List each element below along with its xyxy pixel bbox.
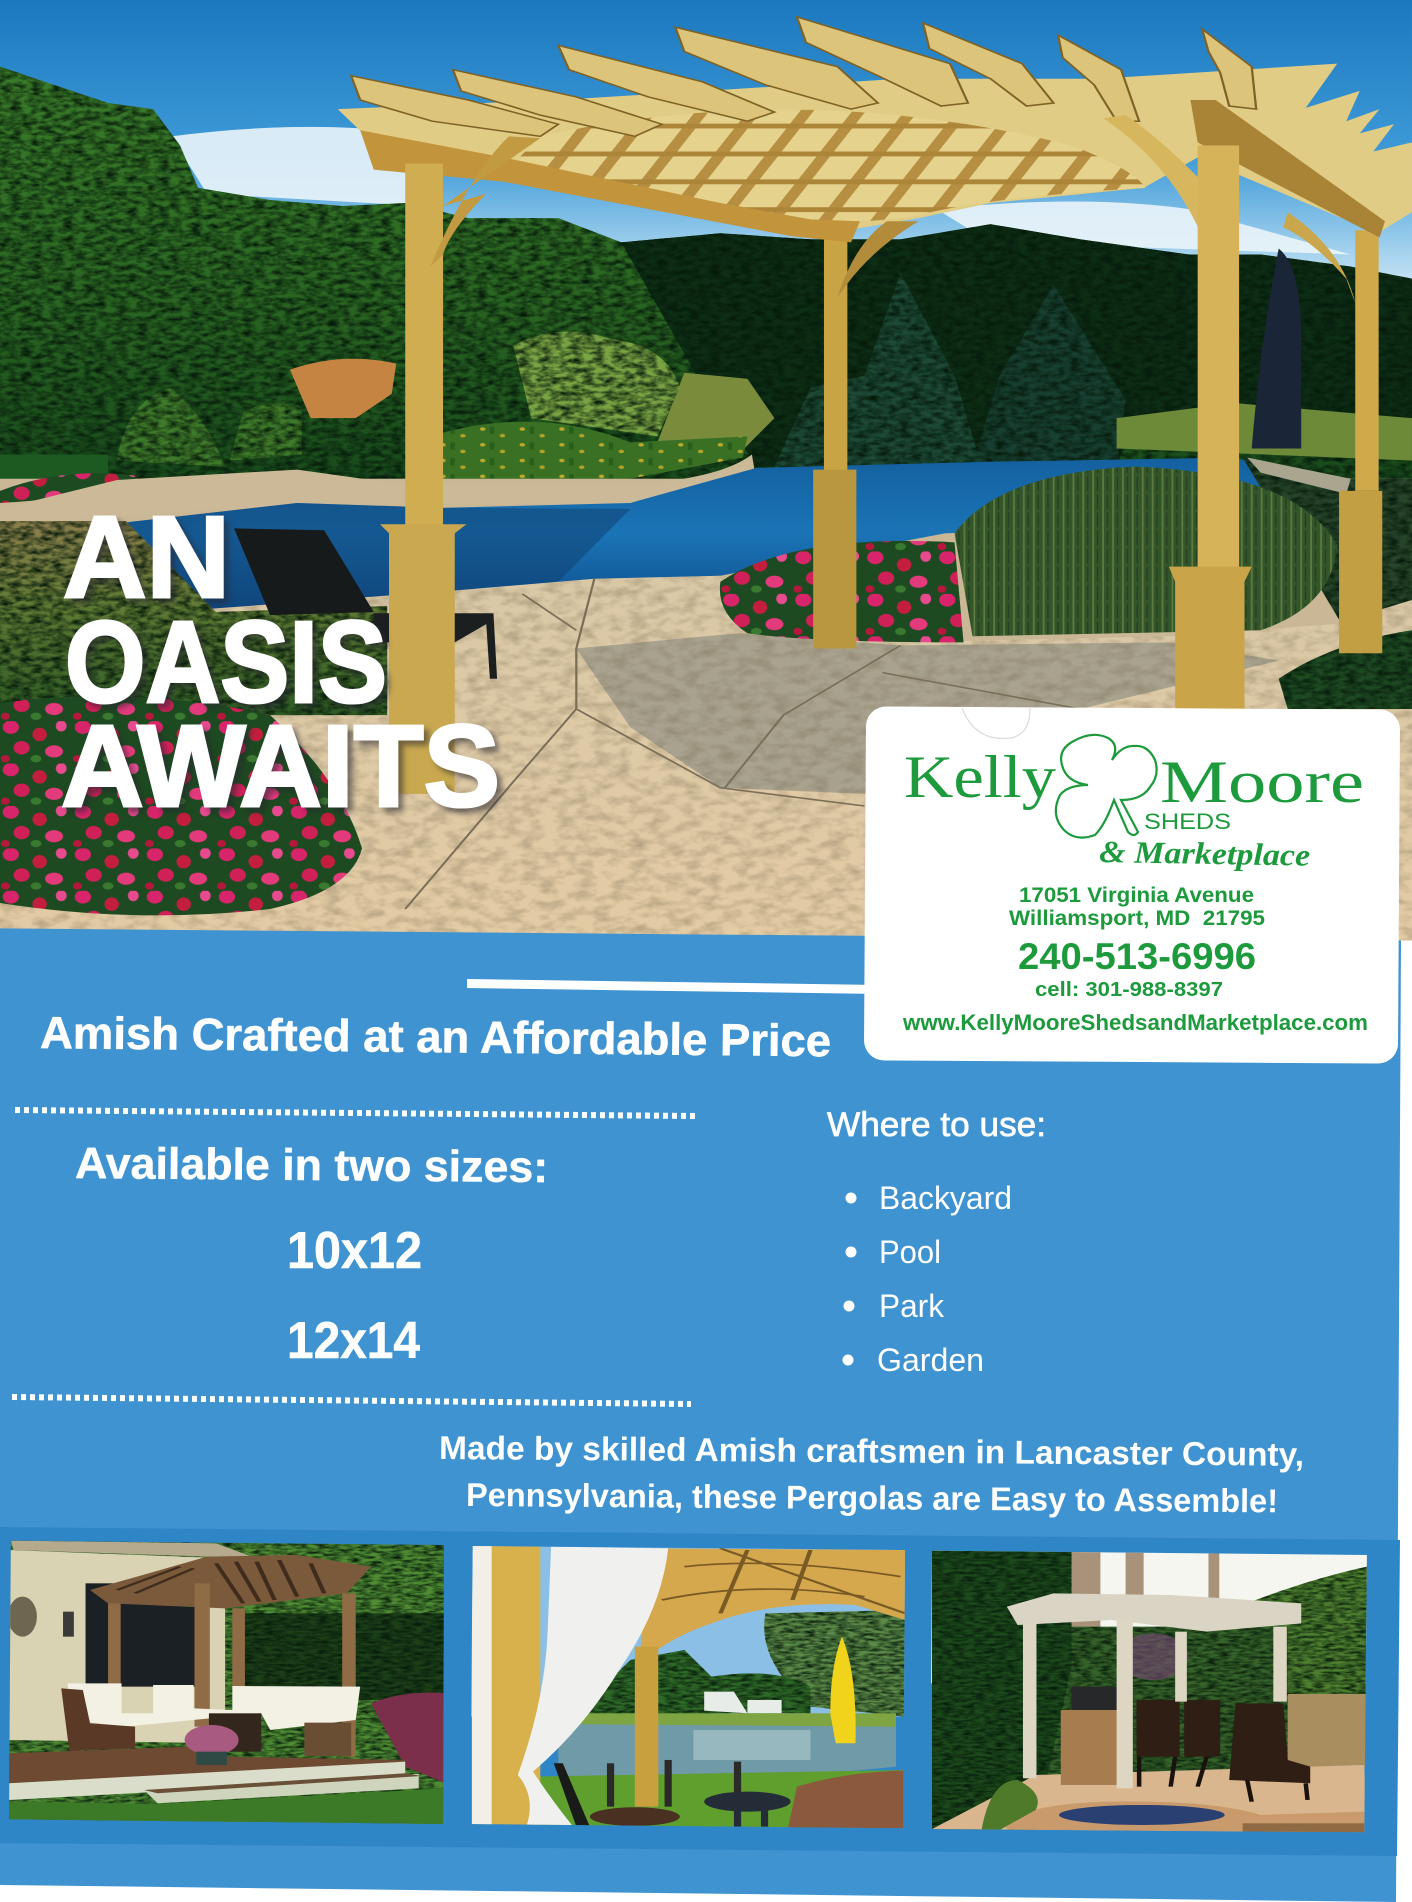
faint printed outline	[962, 708, 1030, 738]
cell: cell: 301-988-8397	[1035, 979, 1223, 1001]
base rear centre	[813, 470, 856, 648]
front left post	[405, 164, 443, 527]
rear right bracket	[1283, 212, 1355, 303]
sliding door	[86, 1583, 195, 1687]
clouds	[171, 127, 1351, 255]
far bank	[576, 1713, 896, 1728]
heading: An Oasis Awaits: OASIS	[65, 597, 387, 727]
size 10x12: 10x12	[287, 1222, 422, 1280]
wood post foreground	[473, 1546, 540, 1829]
flower bed with yellow blooms	[441, 422, 747, 482]
front right base	[1169, 567, 1252, 709]
rafters with tips	[351, 17, 1256, 136]
dotted divider bottom	[12, 1397, 691, 1404]
pool water	[126, 458, 1342, 609]
arch lattice	[504, 110, 1145, 222]
bright sky	[928, 1550, 1369, 1683]
shamrock logo	[1056, 735, 1157, 838]
white rule to card	[467, 979, 880, 994]
wall lantern and decor	[8, 1597, 74, 1637]
photo 1: brown pergola on deck	[8, 1540, 450, 1827]
tree line	[0, 67, 1412, 491]
lawn	[9, 1788, 446, 1825]
pink flowers by the hedge	[0, 473, 135, 503]
canopy top	[338, 64, 1412, 236]
left trees	[576, 1650, 810, 1717]
large grass mound	[955, 467, 1337, 636]
heading: An Oasis Awaits: AN	[63, 492, 230, 622]
list items: Pool	[879, 1234, 941, 1270]
plant lower right	[1279, 630, 1412, 709]
logo sheds: SHEDS	[1144, 809, 1231, 834]
far right stone strip	[1247, 458, 1351, 494]
front left base	[380, 524, 466, 794]
deck fascia	[9, 1762, 405, 1800]
size 12x14: 12x14	[287, 1312, 420, 1370]
heading: An Oasis Awaits: AWAITS	[61, 701, 500, 831]
spa surround	[1000, 1802, 1364, 1832]
chair seat and legs	[374, 613, 497, 679]
folded umbrella	[1252, 248, 1301, 448]
list items: Park	[879, 1288, 945, 1324]
dotted divider top	[15, 1110, 695, 1116]
pool reflection	[126, 503, 630, 609]
list items: Garden	[877, 1342, 984, 1378]
spa water	[1059, 1805, 1225, 1825]
dark background conifers	[621, 224, 1412, 467]
low plants	[982, 1780, 1038, 1830]
pergola canopy	[90, 1555, 371, 1608]
spa stone side	[1243, 1823, 1365, 1833]
pergola canopy	[1007, 1593, 1301, 1632]
planter	[590, 1807, 680, 1826]
pergola	[338, 17, 1412, 794]
patio	[0, 576, 1412, 941]
front left bracket	[430, 136, 540, 267]
stone deck and pool curb	[0, 454, 756, 524]
lakeside houses	[704, 1692, 782, 1713]
address	[1009, 884, 1265, 930]
light green shrubs	[513, 332, 680, 436]
lounge chair	[234, 528, 497, 679]
blue spruces	[774, 273, 982, 467]
lounge chair	[61, 1688, 135, 1758]
website: www.KellyMooreShedsandMarketplace.com	[902, 1010, 1368, 1035]
post rear right	[1355, 230, 1379, 491]
flower pot	[185, 1725, 239, 1765]
foliage	[9, 1540, 450, 1827]
chair back	[234, 528, 374, 615]
patio grey stone area	[576, 633, 1279, 794]
patio cracks	[405, 579, 1081, 909]
front post	[635, 1647, 658, 1807]
red and pink flower bed	[0, 696, 362, 915]
step tread	[144, 1773, 421, 1793]
front right post	[1198, 145, 1239, 570]
lawn on far right	[1117, 403, 1412, 461]
left curtain sliver	[472, 1546, 492, 1826]
garden torches	[607, 1760, 741, 1807]
logo name left: Kelly	[904, 744, 1056, 810]
use list	[842, 1180, 1012, 1378]
closing statement	[439, 1429, 1304, 1519]
yellow umbrella	[830, 1637, 856, 1743]
lake	[558, 1724, 896, 1777]
chair legs	[1139, 1757, 1308, 1802]
bullets	[842, 1192, 856, 1366]
house wall	[9, 1550, 225, 1743]
pergola posts	[1023, 1618, 1287, 1788]
closing statement: Pennsylvania, these Pergolas are Easy to Assemble!	[466, 1476, 1278, 1519]
outdoor kitchen	[1061, 1710, 1120, 1785]
sky	[468, 1543, 910, 1717]
photo band	[0, 1527, 1400, 1856]
left ornamental grasses	[0, 521, 387, 715]
far right stone and plants	[1243, 458, 1412, 624]
photo strip	[8, 1540, 1369, 1833]
address: 17051 Virginia Avenue	[1019, 884, 1254, 907]
dining chairs	[1136, 1700, 1310, 1783]
canopy slat lines	[662, 1548, 905, 1613]
stool	[304, 1723, 351, 1756]
dark leg	[554, 1763, 590, 1827]
ornamental orange grass	[290, 359, 396, 418]
right tree	[764, 1610, 905, 1717]
base rear right	[1339, 491, 1382, 653]
canopy slats	[117, 1560, 324, 1603]
hillside grass	[657, 373, 774, 454]
phone: 240-513-6996	[1018, 936, 1256, 977]
stone wall	[1288, 1694, 1367, 1767]
list items: Backyard	[879, 1180, 1012, 1216]
address: Williamsport, MD 21795	[1009, 907, 1265, 930]
wicker chair	[788, 1771, 903, 1828]
right corner brace	[1103, 115, 1202, 236]
left palm mass	[932, 1551, 1072, 1830]
pergola posts	[108, 1583, 356, 1757]
blue panel background	[0, 925, 1412, 1902]
roof	[11, 1541, 257, 1558]
canopy	[639, 1548, 905, 1663]
outdoor grill	[1072, 1687, 1121, 1712]
dark foliage	[243, 1613, 446, 1700]
logo marketplace: & Marketplace	[1099, 834, 1311, 873]
heading: An Oasis Awaits	[61, 492, 500, 831]
side table	[209, 1713, 261, 1752]
closing statement: Made by skilled Amish craftsmen in Lancaster County,	[439, 1429, 1304, 1473]
post rear centre	[824, 236, 847, 473]
business card	[864, 706, 1400, 1064]
tree trunks	[1072, 1552, 1219, 1685]
tagline: Amish Crafted at an Affordable Price	[40, 1007, 831, 1066]
list items	[877, 1180, 1012, 1378]
base ground under pool and plantings	[0, 479, 1412, 661]
deck floor	[9, 1747, 405, 1783]
centre pink flowers	[720, 541, 964, 642]
white sofa	[68, 1683, 360, 1730]
left shrubs	[117, 388, 302, 467]
lawn	[531, 1770, 903, 1828]
right palms	[1238, 1567, 1367, 1700]
card background	[864, 706, 1400, 1064]
middle foliage	[1036, 1627, 1288, 1780]
white curtain	[518, 1547, 668, 1825]
rear centre bracket	[837, 221, 919, 297]
where to use heading: Where to use:	[827, 1106, 1046, 1144]
red leaf shrub	[371, 1693, 446, 1783]
front cross beam	[360, 130, 860, 242]
purple blossoms	[1117, 1633, 1189, 1680]
logo name right: Moore	[1160, 749, 1364, 815]
patio	[930, 1765, 1367, 1832]
sky	[0, 0, 1412, 315]
lake reflection	[693, 1730, 810, 1760]
sizes heading: Available in two sizes:	[75, 1139, 548, 1192]
hero photo: pergola by the pool	[0, 0, 1412, 941]
right front beam	[1190, 100, 1385, 238]
patio table	[704, 1792, 791, 1827]
left hedge	[0, 454, 108, 488]
photo 2: view with curtain and lake	[468, 1543, 910, 1829]
photo 3: white pergola and spa	[928, 1550, 1369, 1833]
deck step	[144, 1774, 419, 1803]
rear posts	[813, 230, 1382, 653]
